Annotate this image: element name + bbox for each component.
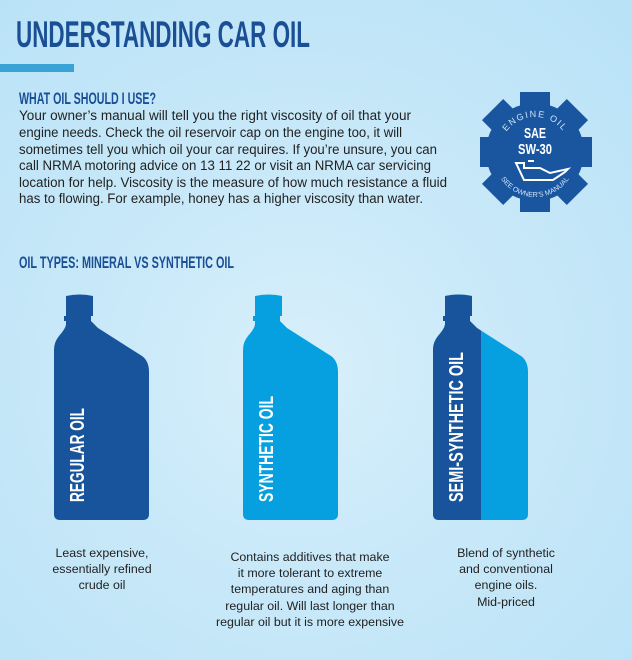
- bottle: synthetic oil: SYNTHETIC OIL: [256, 396, 278, 502]
- badge: engine oil: SW-30: [518, 141, 552, 158]
- bottle: regular oil: REGULAR OIL: [67, 408, 89, 502]
- badge: engine oil: SAE: [524, 125, 546, 142]
- caption: semi-synthetic: Mid-priced: [477, 595, 535, 609]
- body text: engine needs. Check the oil reservoir cap on the engine too, it will: [19, 125, 402, 140]
- bottle: semi-synthetic oil: [433, 294, 528, 520]
- badge: engine oil: SEE OWNER’S MANUAL: [502, 176, 569, 197]
- badge: engine oil: ENGINE OIL: [502, 110, 565, 132]
- caption: semi-synthetic: [457, 546, 555, 609]
- caption: synthetic: [216, 550, 404, 629]
- body text: Your owner’s manual will tell you the right viscosity of oil that your: [19, 108, 411, 123]
- caption: regular: essentially refined: [52, 562, 152, 576]
- caption: synthetic: regular oil. Will last longer than: [225, 599, 395, 613]
- body text: location for help. Viscosity is the measure of how much resistance a fluid: [19, 175, 447, 190]
- caption: semi-synthetic: and conventional: [459, 562, 553, 576]
- caption: synthetic: temperatures and aging than: [231, 582, 389, 596]
- caption: synthetic: it more tolerant to extreme: [238, 566, 382, 580]
- caption: semi-synthetic: engine oils.: [475, 578, 537, 592]
- caption: regular: Least expensive,: [56, 546, 148, 560]
- accent bar: [0, 64, 74, 72]
- body text: call NRMA motoring advice on 13 11 22 or visit an NRMA car servicing: [19, 158, 431, 173]
- caption: synthetic: Contains additives that make: [230, 550, 390, 564]
- body text: [19, 108, 447, 206]
- bottle: synthetic oil: [243, 294, 338, 520]
- caption: regular: crude oil: [79, 578, 125, 592]
- caption: synthetic: regular oil but it is more expensive: [216, 615, 404, 629]
- badge: engine oil: [480, 92, 592, 212]
- caption: regular: [52, 546, 152, 592]
- body text: has to flowing. For example, honey has a higher viscosity than water.: [19, 191, 423, 206]
- body text: sometimes tell you which oil your car requires. If you’re unsure, you can: [19, 142, 437, 157]
- bottle: semi-synthetic oil: SEMI-SYNTHETIC OIL: [446, 352, 468, 502]
- caption: semi-synthetic: Blend of synthetic: [457, 546, 555, 560]
- bottle: regular oil: [54, 294, 149, 520]
